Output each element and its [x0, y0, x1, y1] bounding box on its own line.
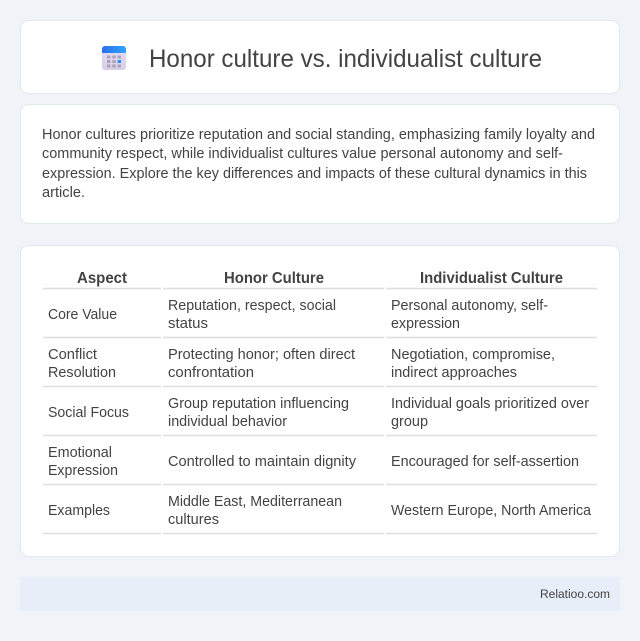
row: social focus: Individual goals prioritized over — [391, 396, 589, 412]
row: conflict resolution: Resolution — [48, 365, 116, 381]
intro paragraph: expression. Explore the key differences and impacts of these cultural dynamics in this — [42, 166, 587, 182]
row: core value — [48, 298, 548, 332]
intro paragraph: community respect, while individualist cultures value personal autonomy and self- — [42, 146, 563, 162]
panel: comparison table — [20, 246, 620, 556]
row: conflict resolution: confrontation — [168, 365, 254, 381]
footer brand text: Relatioo.com — [540, 587, 610, 601]
title text: Honor culture vs. individualist culture — [149, 45, 542, 73]
row: conflict resolution: Conflict — [48, 347, 97, 363]
row: conflict resolution: Negotiation, compromise, — [391, 347, 555, 363]
row: examples — [48, 494, 592, 528]
row: conflict resolution: indirect approaches — [391, 365, 517, 381]
row: core value: expression — [391, 316, 460, 332]
row: core value: Personal autonomy, self- — [391, 298, 548, 314]
row: conflict resolution — [48, 347, 555, 381]
row: examples: cultures — [168, 512, 219, 528]
row: emotional expression: Controlled to maintain dignity — [168, 454, 357, 470]
row: examples: Examples — [48, 503, 110, 519]
row: examples: Middle East, Mediterranean — [168, 494, 342, 510]
row: core value: Core Value — [48, 307, 117, 323]
footer — [20, 577, 620, 611]
row: emotional expression: Expression — [48, 463, 118, 479]
row: core value: Reputation, respect, social — [168, 298, 336, 314]
table header row — [77, 270, 563, 287]
row: social focus: group — [391, 414, 428, 430]
table header row: Aspect — [77, 270, 127, 287]
row: examples: Western Europe, North America — [391, 503, 592, 519]
row: emotional expression: Encouraged for self-assertion — [391, 454, 579, 470]
panel: title — [20, 20, 620, 94]
row: social focus: Group reputation influencing — [168, 396, 349, 412]
intro paragraph: article. — [42, 185, 85, 201]
table header row: Individualist Culture — [420, 270, 563, 287]
icon: calendar — [102, 46, 126, 70]
row: social focus: individual behavior — [168, 414, 287, 430]
row: social focus: Social Focus — [48, 405, 129, 421]
panel: introduction — [20, 104, 620, 224]
row: conflict resolution: Protecting honor; often direct — [168, 347, 355, 363]
row: core value: status — [168, 316, 208, 332]
row: emotional expression — [48, 445, 579, 479]
row: social focus — [48, 396, 589, 430]
table header row: Honor Culture — [224, 270, 324, 287]
intro paragraph — [42, 127, 595, 201]
row: emotional expression: Emotional — [48, 445, 112, 461]
intro paragraph: Honor cultures prioritize reputation and social standing, emphasizing family loyalty and — [42, 127, 595, 143]
